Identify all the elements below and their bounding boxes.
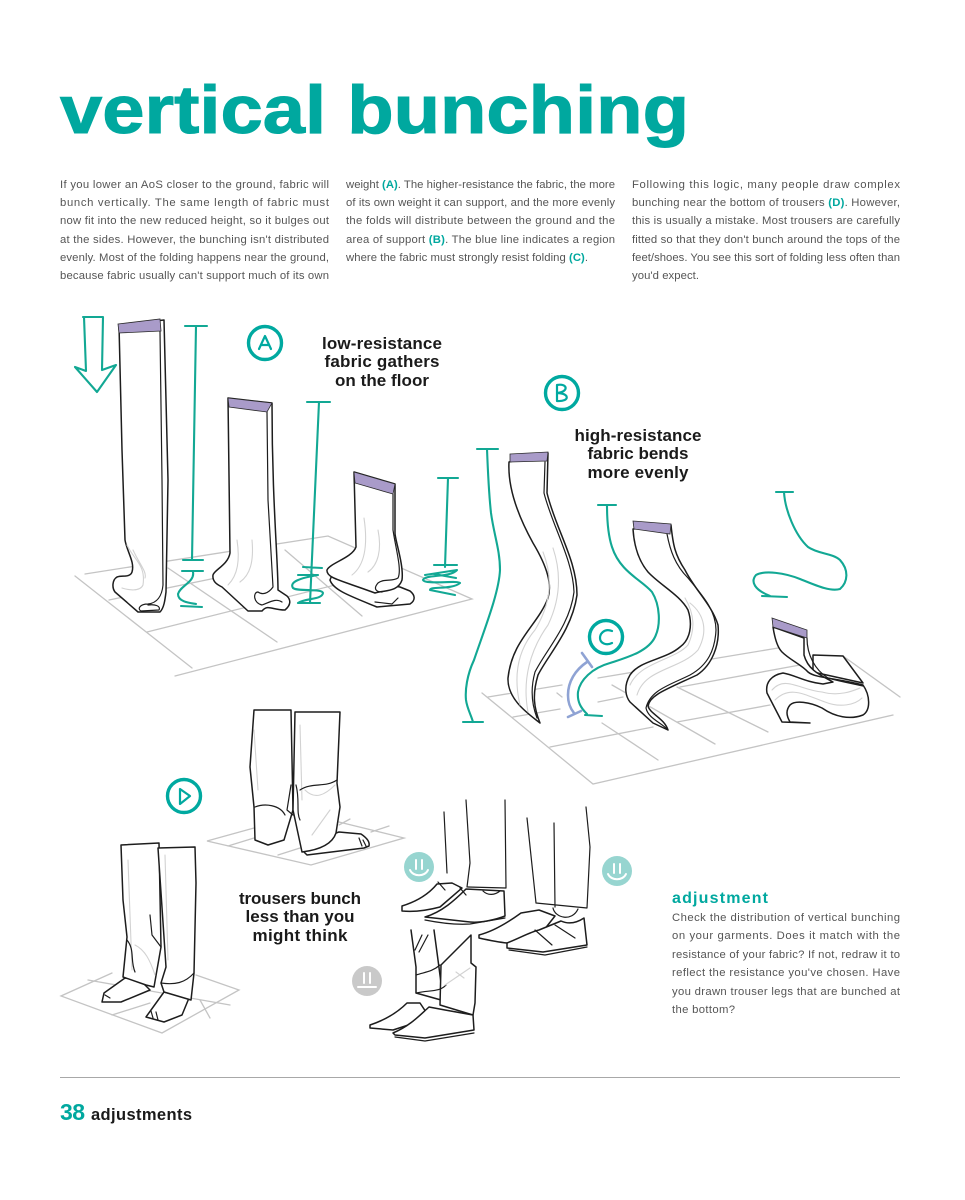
text block: column 2: the folds will distribute between the ground and the: [346, 215, 615, 227]
icon: happy face 2: [602, 856, 632, 886]
adjustment heading: adjustment: [672, 890, 769, 907]
measure line A1: [178, 326, 207, 607]
text block: column 2: of its own weight it can support, and the more evenly: [346, 197, 615, 209]
icon: down arrow: [75, 317, 116, 392]
shoes: good fit, right pair: [479, 807, 590, 955]
text block: column 3: bunching near the bottom of trousers (D). However,: [632, 197, 900, 209]
measure line B3: [754, 492, 846, 597]
pair of bare feet: back view: [207, 710, 404, 865]
text block: column 1: If you lower an AoS closer to the ground, fabric will: [60, 179, 329, 191]
heading: high-resistance: more evenly: [588, 463, 689, 482]
text block: column 1: bunch vertically. The same length of fabric must: [60, 197, 330, 209]
text block: column 3: this is usually a mistake. Most trousers are carefully: [632, 215, 900, 227]
icon: neutral face: [352, 966, 382, 996]
heading: trousers bunch: might think: [252, 926, 348, 945]
fabric B1: [508, 452, 577, 723]
text block: column 3: [632, 179, 900, 282]
text block: column 3: fitted so that they don't bunch around the tops of the: [632, 234, 900, 246]
title: vertical bunching: [60, 72, 689, 148]
adjustment text: the bottom?: [672, 1004, 735, 1016]
badge B: [546, 376, 578, 410]
text block: column 3: Following this logic, many people draw complex: [632, 179, 900, 191]
text block: column 1: now fit into the new reduced height, so it bulges out: [60, 215, 330, 227]
heading: high-resistance: fabric bends: [588, 444, 688, 463]
heading: high-resistance: high-resistance: [574, 426, 702, 445]
measure line B1: [463, 449, 500, 722]
adjustment text: reflect the resistance you've chosen. Have: [672, 967, 900, 979]
fabric A3: [327, 472, 414, 607]
shoes: too bunched: [370, 930, 476, 1041]
pair of bare feet: front view: [61, 843, 239, 1033]
heading: low-resistance: low-resistance: [322, 334, 442, 353]
heading: trousers bunch: less than you: [246, 907, 354, 926]
adjustment text: on your garments. Does it match with the: [672, 930, 900, 942]
text block: column 1: because fabric usually can't support much of its own: [60, 270, 329, 282]
measure line B2: [578, 505, 659, 716]
text block: column 2: area of support (B). The blue line indicates a region: [346, 234, 615, 246]
fabric A2: [213, 398, 290, 611]
adjustment text: resistance of your fabric? If not, redraw it to: [672, 949, 900, 961]
measure line A3: [423, 478, 460, 595]
adjustment text: [672, 912, 901, 1016]
fabric B2: [626, 521, 718, 730]
fabric B3: [767, 618, 869, 723]
text block: column 3: you'd expect.: [632, 270, 699, 282]
heading: high-resistance: [574, 426, 702, 482]
badge D: [168, 780, 200, 812]
heading: low-resistance: [322, 334, 442, 390]
text block: column 2: [345, 179, 615, 264]
text block: column 2: where the fabric must strongly resist folding (C).: [345, 252, 588, 264]
heading: trousers bunch: trousers bunch: [239, 889, 361, 908]
badge A: [248, 326, 282, 360]
footer: page number and section: [60, 1099, 192, 1125]
text block: column 2: weight (A). The higher-resistance the fabric, the more: [345, 179, 615, 191]
heading: low-resistance: on the floor: [335, 371, 429, 390]
footer: page number and section: 38: [60, 1099, 85, 1125]
text block: column 1: evenly. Most of the folding happens near the ground,: [60, 252, 329, 264]
badge C: [590, 620, 622, 654]
text block: column 1: [60, 179, 330, 282]
shoes: good fit, left pair: [402, 800, 506, 924]
adjustment text: Check the distribution of vertical bunching: [672, 912, 900, 924]
text block: column 3: feet/shoes. You see this sort of folding less often than: [632, 252, 900, 264]
fabric A1: [113, 319, 168, 612]
icon: happy face 1: [404, 852, 434, 882]
floor grid A: [75, 536, 472, 676]
adjustment text: you drawn trouser legs that are bunched at: [672, 986, 901, 998]
blue arc: resistance region: [568, 653, 592, 717]
heading: low-resistance: fabric gathers: [324, 352, 440, 371]
footer: page number and section: adjustments: [91, 1106, 192, 1124]
measure line A2: [292, 402, 330, 603]
heading: trousers bunch: [239, 889, 361, 945]
text block: column 1: at the sides. However, the bunching isn't distributed: [60, 234, 329, 246]
floor grid B: [482, 648, 900, 784]
